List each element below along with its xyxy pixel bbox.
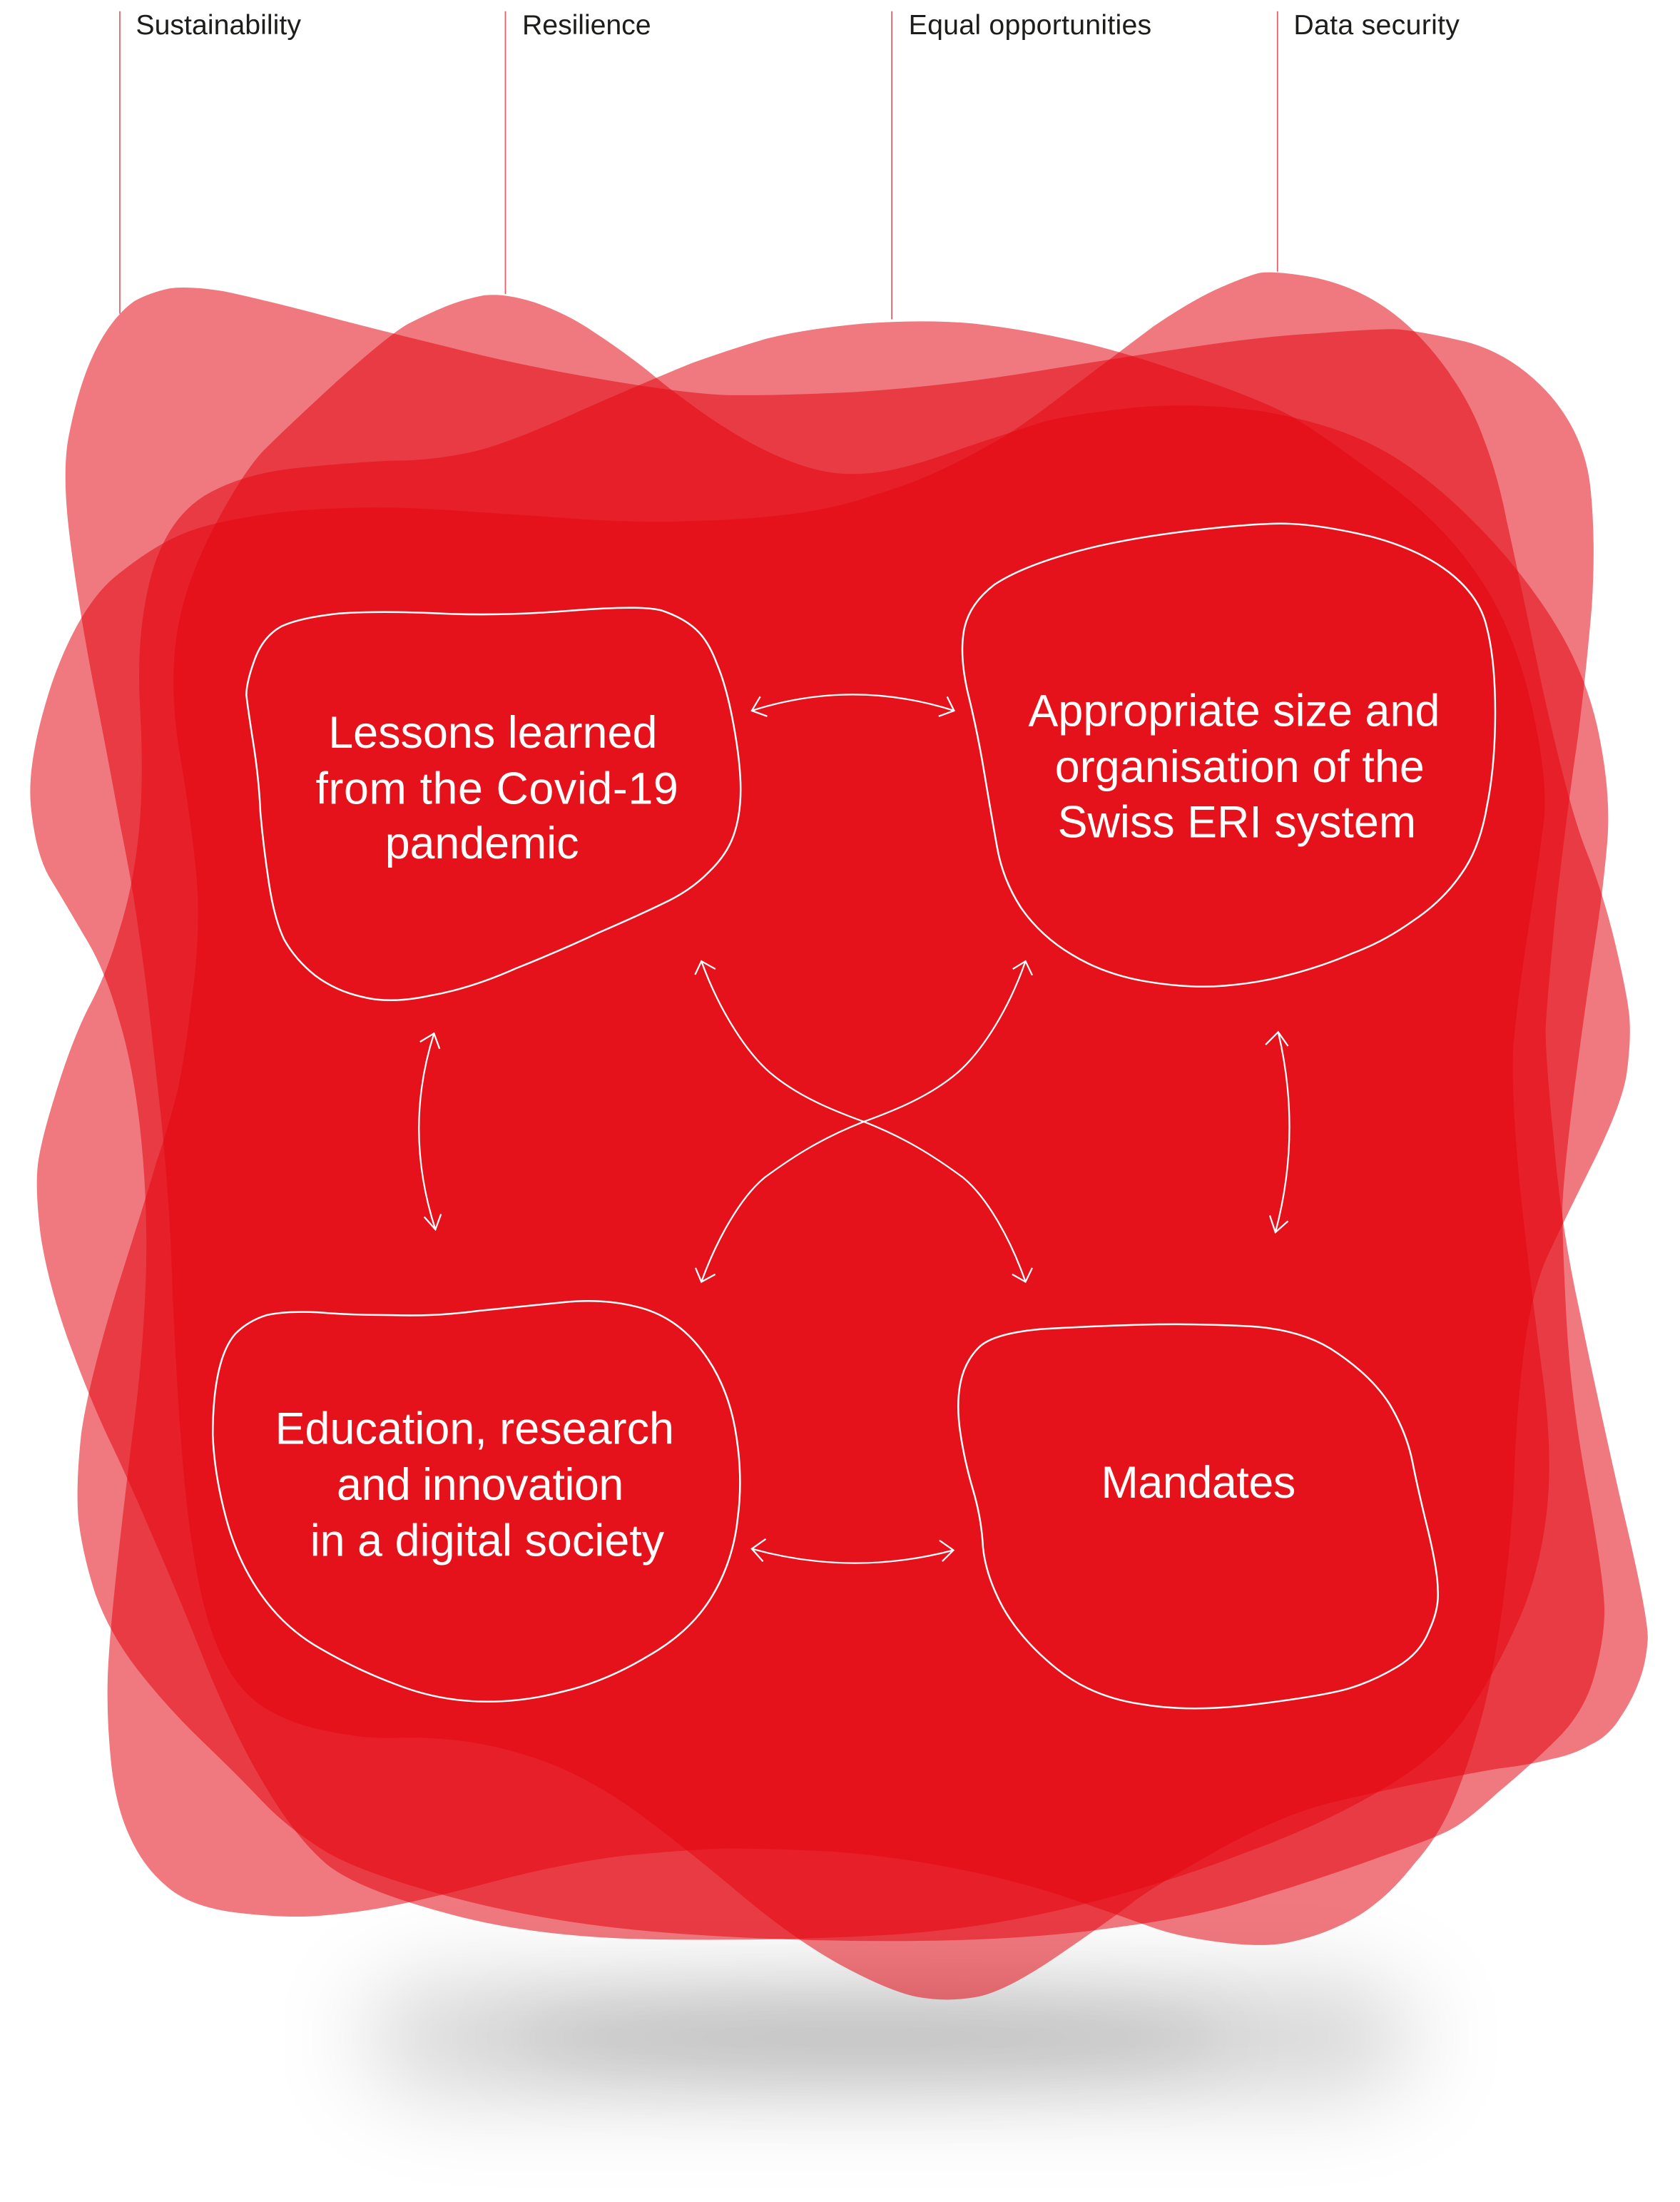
arrow: appropriate size to mandates (1266, 1032, 1290, 1232)
topic: Appropriate size (962, 524, 1495, 987)
text: appropriate size: Appropriate size and (1028, 686, 1440, 736)
text: lessons learned: from the Covid-19 (316, 763, 678, 813)
text: appropriate size: Swiss ERI system (1058, 798, 1416, 848)
text: lessons learned: pandemic (385, 818, 579, 868)
outline: lessons learned blob (246, 608, 740, 1000)
theme: Resilience: Resilience (522, 9, 651, 41)
arrow: lessons to appropriate size (752, 694, 954, 716)
outline: appropriate size blob (962, 524, 1495, 987)
text: education: in a digital society (310, 1516, 665, 1566)
overlapping red blobs (30, 273, 1648, 1999)
blob: equal opportunities (37, 321, 1549, 1939)
ground shadow (367, 1986, 1414, 2089)
text: appropriate size: organisation of the (1055, 742, 1425, 792)
arrow: education to mandates (752, 1539, 953, 1563)
topic: Lessons learned (246, 608, 740, 1000)
theme lines and labels (120, 9, 1460, 319)
topic: Education (213, 1301, 740, 1702)
text: education: and innovation (337, 1460, 623, 1510)
outline: education blob (213, 1301, 740, 1702)
blob: sustainability (66, 288, 1648, 1999)
double arrows (419, 694, 1290, 1563)
theme: Data security: Data security (1293, 9, 1460, 41)
text: education: Education, research (275, 1404, 674, 1453)
theme: Sustainability: Sustainability (136, 9, 301, 41)
outline: mandates blob (958, 1324, 1438, 1708)
arrow: appropriate size to education (696, 961, 1032, 1282)
blob: resilience (78, 295, 1608, 1941)
arrow: lessons to education (419, 1033, 441, 1229)
theme: Equal opportunities: Equal opportunities (909, 9, 1151, 41)
text: lessons learned: Lessons learned (328, 708, 657, 758)
blob: data security (30, 273, 1630, 1945)
text: mandates: Mandates (1101, 1458, 1295, 1508)
arrow: lessons to mandates (695, 961, 1032, 1282)
topic: Mandates (958, 1324, 1438, 1708)
